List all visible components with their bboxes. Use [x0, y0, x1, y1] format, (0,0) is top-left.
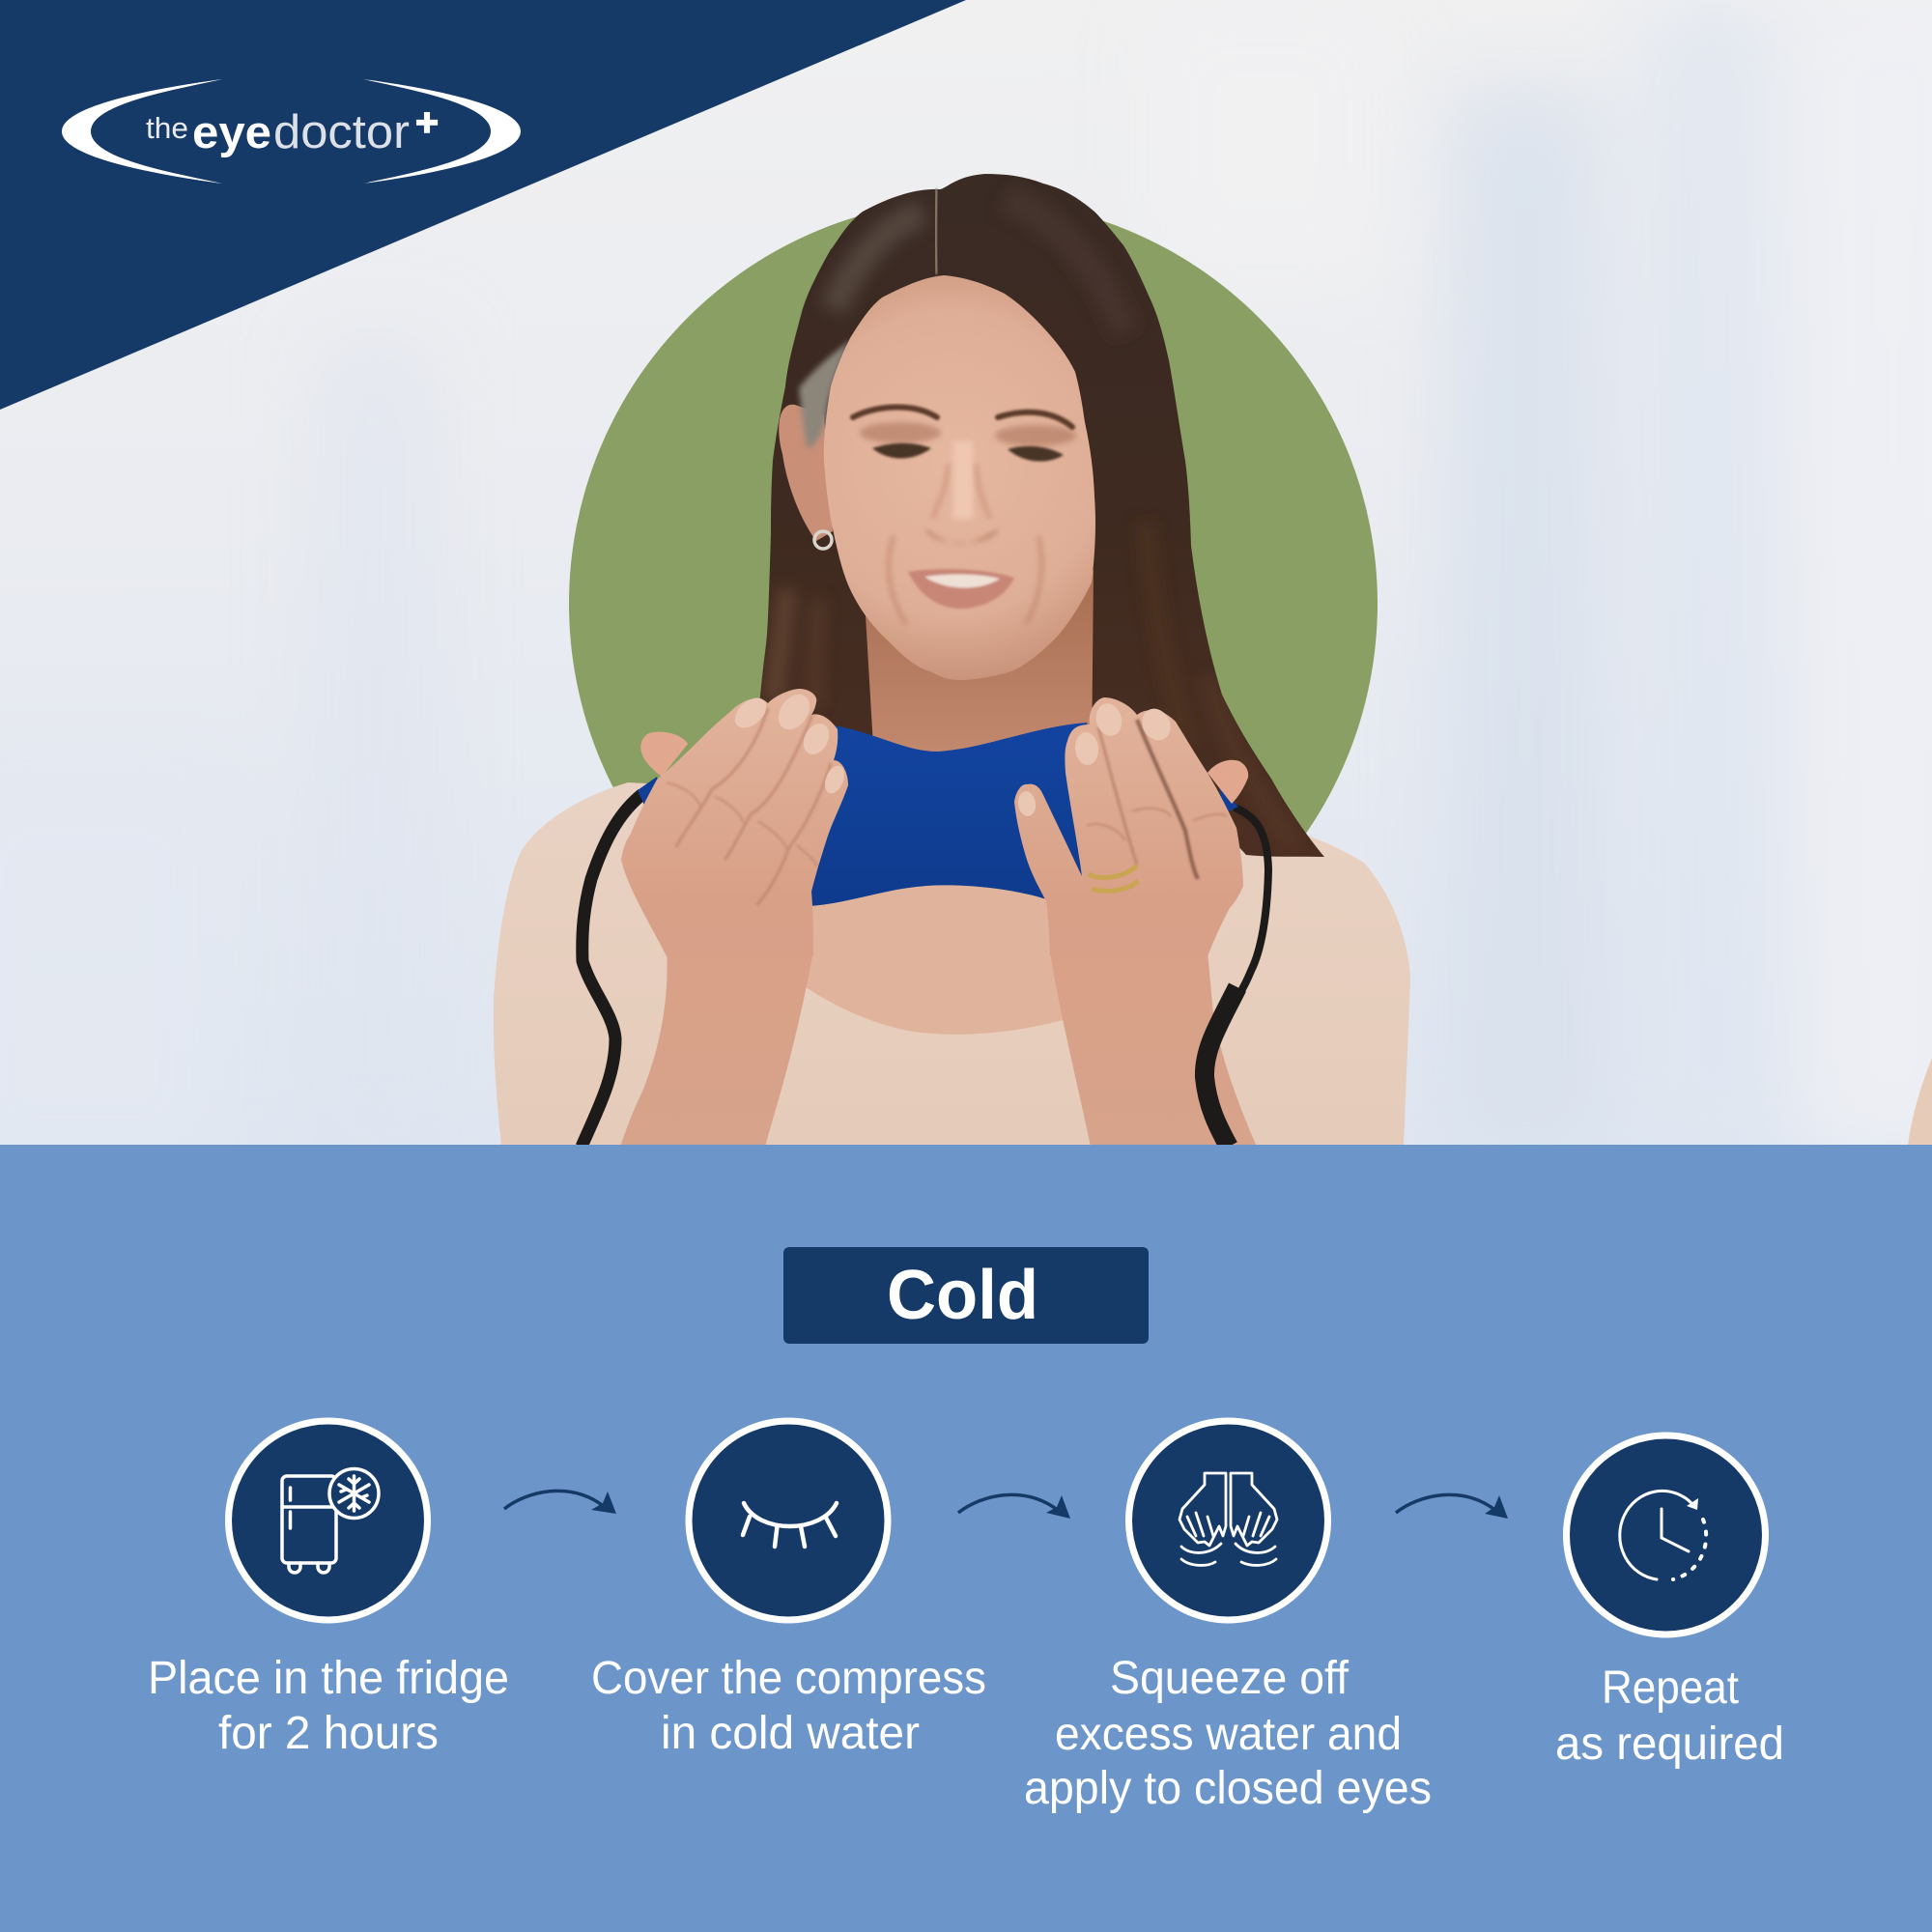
- right hand: [1014, 697, 1243, 956]
- shirt: [494, 782, 1410, 1145]
- logo: the eye doctor plus: eye: [192, 106, 271, 157]
- left thumb: [640, 732, 688, 777]
- step 3 caption: [1024, 1653, 1432, 1814]
- step 3 caption: excess water and: [1055, 1709, 1402, 1760]
- logo: the eye doctor plus: doctor: [273, 106, 410, 158]
- icon: fridge with snowflake: [228, 1421, 427, 1620]
- cheek lines: [889, 536, 1041, 624]
- left strap: [582, 794, 642, 1147]
- closed eyes: [872, 443, 1064, 462]
- photo background: [0, 0, 1932, 1179]
- step 4: clock: [1555, 1435, 1784, 1770]
- eye socket shading: [860, 422, 1076, 446]
- right strap lower: [1205, 987, 1237, 1147]
- step 4 caption: [1555, 1662, 1784, 1770]
- step 1 caption: [148, 1653, 509, 1759]
- step 3: hands: [1024, 1421, 1432, 1814]
- step 2: eye: [591, 1421, 986, 1759]
- icon: squeezing hands: [1128, 1421, 1327, 1620]
- logo: the eye doctor plus: +: [415, 101, 439, 144]
- blue instructions panel: [0, 1145, 1932, 1932]
- earring: [814, 531, 832, 549]
- step 2 caption: in cold water: [661, 1708, 920, 1759]
- nose: [925, 441, 999, 544]
- right finger creases: [1087, 720, 1227, 879]
- gold rings: [1089, 866, 1138, 891]
- photo: woman holding blue eye compress: [494, 174, 1410, 1147]
- face: [824, 275, 1095, 680]
- step 3 caption: Squeeze off: [1110, 1653, 1350, 1704]
- eyebrows: [853, 407, 1072, 427]
- blue eye compress: [810, 723, 1101, 913]
- ear: [779, 405, 833, 541]
- step 4 caption: as required: [1555, 1719, 1784, 1770]
- mouth: [908, 569, 1014, 609]
- green circle: [569, 199, 1378, 1009]
- chest: [797, 879, 1096, 1035]
- arrow 1: [504, 1491, 616, 1514]
- step 4 caption: Repeat: [1602, 1662, 1739, 1714]
- grey temple hair: [799, 340, 850, 449]
- hair part: [935, 188, 937, 274]
- left hand: [621, 689, 848, 956]
- icon: clock with dotted arrow: [1567, 1435, 1766, 1634]
- step 1 caption: for 2 hours: [218, 1708, 439, 1759]
- step 1: fridge: [148, 1421, 509, 1759]
- neck: [865, 570, 1094, 763]
- right strap upper: [1219, 808, 1268, 1024]
- left finger creases: [667, 708, 831, 905]
- step 2 caption: [591, 1653, 986, 1759]
- navy corner triangle: [0, 0, 966, 410]
- compress ends: [638, 777, 1238, 813]
- hair: [759, 174, 1324, 857]
- step 2 caption: Cover the compress: [591, 1653, 986, 1704]
- right fingernails: [1016, 700, 1176, 817]
- logo: the eye doctor plus: [62, 79, 521, 184]
- step 1 caption: Place in the fridge: [148, 1653, 509, 1704]
- heading badge: Cold: Cold: [887, 1257, 1038, 1334]
- arrow 3: [1396, 1494, 1508, 1519]
- right thumb: [1208, 760, 1248, 804]
- icon: closed eye: [689, 1421, 888, 1620]
- hair highlights: [763, 193, 1236, 752]
- left forearm: [620, 947, 813, 1147]
- arrow 2: [958, 1494, 1070, 1519]
- logo: the eye doctor plus: the: [146, 111, 188, 145]
- step 3 caption: apply to closed eyes: [1024, 1763, 1432, 1814]
- heading badge: Cold: [783, 1247, 1149, 1344]
- right forearm: [1050, 952, 1257, 1147]
- left fingernails: [729, 689, 848, 796]
